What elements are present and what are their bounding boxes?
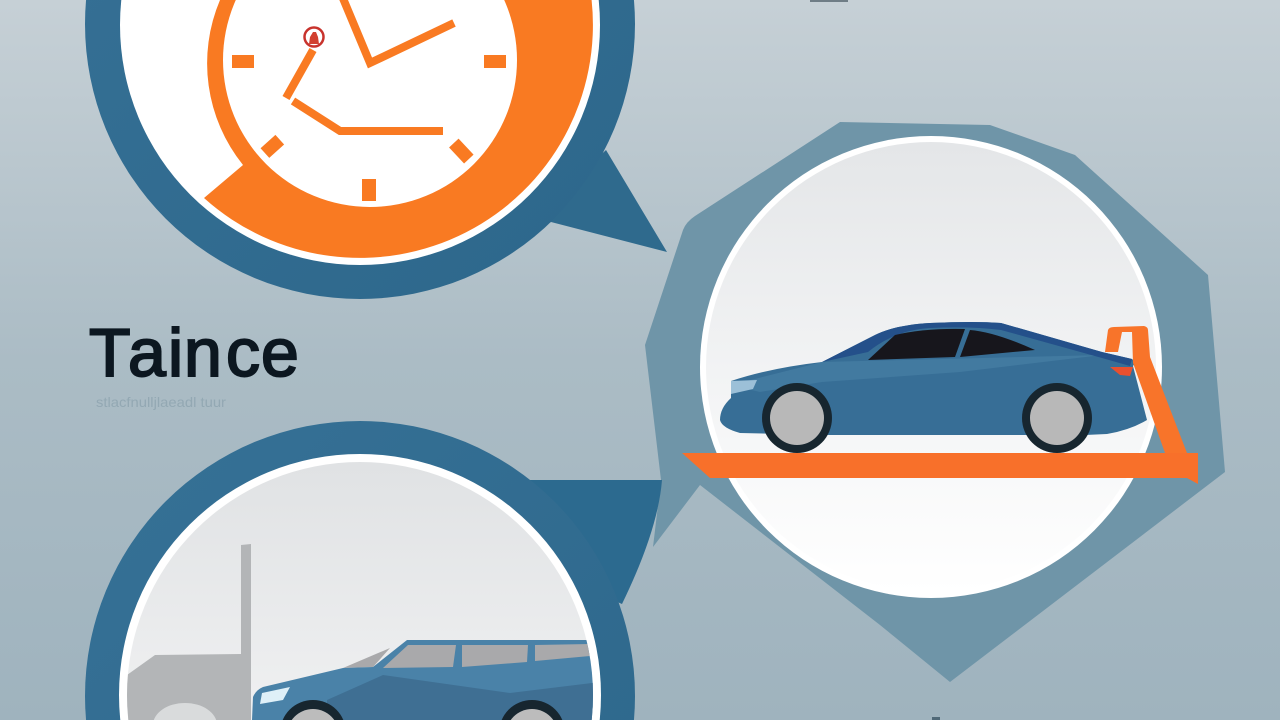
white disc (700, 136, 1162, 598)
badge backing shape (645, 122, 1225, 682)
tow arm (1105, 326, 1187, 453)
top text fragment (810, 0, 848, 2)
window front (868, 329, 965, 360)
headlight (731, 380, 757, 394)
car: sedan on flatbed (720, 322, 1147, 453)
car lower shade (327, 675, 600, 720)
white arch (153, 703, 217, 720)
white disc (120, 0, 600, 265)
window 1 (383, 645, 456, 668)
windshield grey (343, 648, 390, 668)
wheels (762, 383, 1092, 453)
icon: clock hands (286, 0, 454, 131)
car body (720, 322, 1147, 435)
bubble ring (85, 421, 635, 720)
speech bubble: crash scene (85, 421, 662, 720)
car roof band (822, 322, 1132, 366)
flatbed (682, 453, 1198, 484)
icon: red pivot (304, 28, 324, 46)
inner disc (127, 462, 593, 720)
icon: orange clock band (204, 0, 593, 258)
bubble tail (500, 150, 667, 252)
grey building silhouette (127, 544, 251, 720)
title: Taince (89, 315, 299, 391)
tail light (1110, 367, 1133, 376)
bubble tail (520, 480, 662, 604)
white disc (119, 454, 601, 720)
headlight (260, 687, 290, 704)
inner disc (706, 142, 1156, 592)
window 2 (462, 645, 528, 667)
icon: clock ticks (232, 55, 506, 201)
panel: towed car badge (645, 122, 1225, 682)
bubble ring (85, 0, 635, 299)
subtitle: stlacfnulljlaeadl tuur (96, 394, 226, 410)
window 3 (535, 644, 590, 661)
crash illustration (127, 544, 600, 720)
window rear (960, 330, 1035, 357)
car body (252, 640, 600, 720)
speech bubble: clock (85, 0, 667, 299)
bottom text fragment (932, 717, 940, 720)
car shoulder highlight (731, 355, 1102, 392)
front wheel (280, 700, 346, 720)
clock face (223, 0, 517, 207)
rear wheel (499, 700, 565, 720)
